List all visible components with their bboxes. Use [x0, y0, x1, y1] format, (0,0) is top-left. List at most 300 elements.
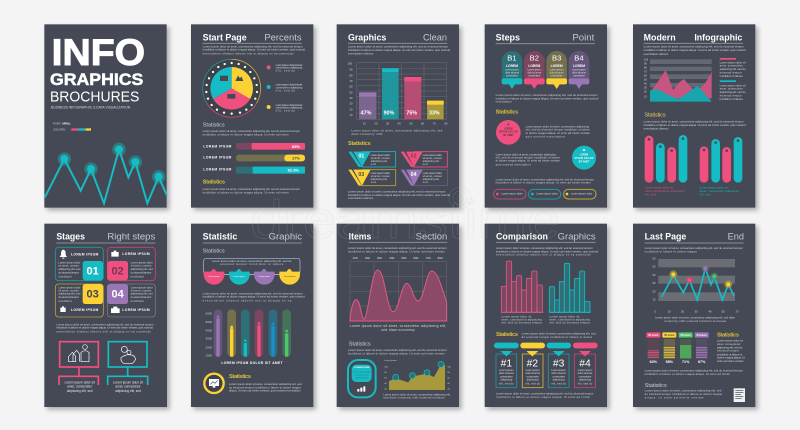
- pink frame caption: adipiscing elit, sed: [67, 389, 93, 393]
- olive area chart: 20: [384, 388, 388, 390]
- tile 01: Lorem ipsum dolor: [371, 153, 390, 157]
- step B4: LOREM: [573, 64, 585, 68]
- intro text: [645, 246, 743, 253]
- area chart: 200: [365, 256, 370, 260]
- olive area chart: Lorem ipsum: [384, 359, 397, 362]
- bottom text: sed diam nonummy nibh euismod tincidunt: [383, 396, 445, 400]
- card 01: do eiusmod tempor: [58, 270, 79, 274]
- intro text: incididunt ut labore et dolore magna aliqua. Ut enim ad minim veniam, quis nostrud: [348, 48, 450, 52]
- olive area chart: 60: [384, 377, 388, 379]
- area chart: 700: [426, 256, 431, 260]
- callout text 1: elit, sed do eiusmod tempor incididunt ut labore: [526, 128, 590, 132]
- side statistics text: incididunt ut labore et: [717, 352, 743, 356]
- callout text 1: quis nostrud exercitation: [526, 135, 565, 139]
- olive area chart: 100: [447, 366, 452, 368]
- bottom statistics text: [203, 180, 300, 195]
- intro text: incididunt ut labore et dolore magna aliqua. Ut enim ad minim veniam, quis nostrud: [496, 249, 598, 253]
- step B2: Lorem ipsum: [527, 68, 542, 72]
- flow of half circles: Lorem ipsum: [208, 275, 220, 278]
- card 03: sit amet, consec: [58, 288, 80, 292]
- flow of half circles: Lorem ipsum: [233, 275, 245, 278]
- intro text: Lorem ipsum dolor sit amet, consectetur adipiscing elit, sed do eiusmod tempor: [348, 45, 448, 49]
- statistics text: [644, 112, 746, 130]
- statistics text: incididunt ut labore et dolore magna aliqua. Ut enim ad minim veniam, quis nostrud: [644, 123, 746, 127]
- heading: Graphics: [558, 231, 596, 241]
- rounded bars group 1: [645, 135, 687, 183]
- cyan icon frame: [108, 342, 148, 385]
- card 02: sit amet, consec: [131, 264, 152, 268]
- pie legend: elit, sed do: [276, 109, 295, 113]
- bottom text: exercitation ullamco: [348, 196, 374, 200]
- stripe meter 4: B4 lorem: [697, 334, 707, 337]
- statistics text: incididunt ut labore et dolore magna aliqua. Ut enim ad minim: [203, 132, 289, 136]
- rank 4: #4: [579, 358, 591, 369]
- statistics text: [496, 331, 596, 339]
- callout text 1: Lorem ipsum dolor sit amet, consectetur adipiscing: [526, 125, 589, 129]
- area chart: 90: [644, 63, 647, 66]
- intro text: Lorem ipsum dolor sit amet, consectetur adipiscing elit, sed do eiusmod tempor: [203, 44, 303, 48]
- vertical bar chart: 2000: [206, 345, 212, 349]
- lower text: [496, 177, 594, 185]
- step B1: LOREM: [506, 64, 518, 68]
- step B3: Lorem ipsum: [550, 68, 564, 72]
- card 02: do eiusmod tempor: [131, 270, 151, 274]
- heading: [56, 232, 156, 243]
- card 04: incididunt: [131, 299, 144, 303]
- side statistics text: enim ad minim veniam: [717, 359, 744, 363]
- chart legend: incididunt ut labore: [720, 74, 743, 78]
- stripe meter 3: [679, 332, 693, 364]
- area chart: 100: [353, 256, 358, 260]
- statistics text: do eiusmod tempor incididunt ut labore et dolore magna: [229, 385, 301, 389]
- statistics text: [203, 123, 300, 136]
- step B2: dolor sit amet: [527, 70, 542, 74]
- statistics text: Statistics: [229, 374, 251, 380]
- bar chart: 50: [409, 122, 413, 126]
- area chart: 300: [377, 256, 382, 260]
- pink caption: [645, 186, 685, 196]
- heading: Items: [349, 231, 371, 241]
- pink caption: elit, sed: [645, 192, 656, 196]
- cover title: [50, 31, 145, 110]
- side statistics text: Lorem ipsum dolor sit: [717, 339, 743, 343]
- bar chart: 40: [349, 96, 353, 100]
- line chart: [652, 256, 739, 314]
- cyan frame caption: Lorem ipsum dolor sit: [113, 381, 143, 385]
- chart caption: Lorem ipsum dolor sit amet, consectetur adipiscing elit,: [350, 324, 446, 328]
- side statistics text: [717, 332, 745, 363]
- font and colors note: COLORS:: [53, 127, 66, 131]
- cover title: INFO: [52, 31, 145, 73]
- cyan info badge: Lorem ipsum dolor: [353, 370, 371, 373]
- pink circle callout: IPSUM DOLOR: [499, 132, 518, 134]
- tile 03: sed: [371, 180, 376, 184]
- statistics text: Statistics: [496, 332, 518, 338]
- brochure 5: modern infographic: [633, 24, 755, 208]
- bottom text: [348, 190, 450, 200]
- card 02: incididunt: [131, 274, 144, 278]
- tile 04: sit amet, consec: [423, 174, 443, 178]
- olive area chart: [384, 359, 452, 390]
- olive area chart: 60: [447, 377, 451, 379]
- tile 02: 02: [411, 154, 417, 160]
- tile 01: sed: [371, 162, 376, 166]
- bar chart: 40: [398, 122, 401, 126]
- step B3: [546, 51, 567, 89]
- intro text: incididunt ut labore et dolore magna: [645, 249, 697, 253]
- bottom text: [383, 392, 451, 400]
- bar chart: 10: [363, 122, 366, 126]
- vertical bar chart: 3000: [206, 337, 212, 341]
- bar chart: 80: [444, 122, 448, 126]
- tile 01: sit amet, consec: [371, 156, 391, 160]
- chart legend: eiusmod tempor: [720, 94, 742, 98]
- pie legend: consectetur adipiscing: [276, 85, 303, 89]
- cyan info badge: sit amet, consec: [354, 373, 370, 376]
- bar chart: 80: [349, 73, 353, 77]
- card 01: 01: [87, 265, 99, 277]
- rank 2: dolor sit amet: [525, 371, 540, 375]
- vertical bar chart: 1000: [206, 354, 212, 358]
- step B3: B3: [552, 54, 561, 63]
- tile 02: [401, 152, 447, 167]
- bar chart: 10: [349, 113, 353, 117]
- tile 02: sit amet, consec: [423, 156, 443, 160]
- tile 01: 01: [358, 154, 364, 160]
- olive area chart: 100: [384, 366, 389, 368]
- tile 04: [401, 170, 447, 186]
- step B3: LOREM: [551, 64, 563, 68]
- rank 1: [494, 343, 519, 388]
- statistics text: [348, 341, 447, 355]
- bottom statistics text: incididunt ut labore et dolore magna aliqua. Ut enim ad minim: [203, 191, 289, 195]
- progress bars: LOREM IPSUM: [203, 155, 232, 159]
- chart captions: [501, 314, 590, 325]
- heading: Steps: [496, 32, 520, 42]
- line chart: 50: [652, 265, 656, 269]
- heading: [348, 32, 447, 43]
- bottom text: Lorem ipsum dolor sit amet, consectetur adipiscing elit,: [383, 392, 451, 396]
- bottom text: Lorem ipsum dolor sit amet, consectetur adipiscing elit, sed do eiusmod tempor: [348, 190, 445, 194]
- bottom text: Lorem ipsum dolor sit amet, consectetur adipiscing elit, sed do eiusmod tempor: [496, 392, 593, 396]
- cyan frame caption: amet, consectetur: [115, 385, 141, 389]
- rank 1: adipiscing: [500, 378, 513, 382]
- line chart: 50: [722, 310, 725, 314]
- rank 2: Lorem ipsum: [525, 368, 541, 372]
- olive area chart: 40: [384, 383, 388, 385]
- side statistics text: eiusmod tempor: [717, 349, 739, 353]
- step B1: consectetur: [506, 73, 518, 77]
- card 04: do eiusmod tempor: [131, 295, 151, 299]
- cyan frame caption: [113, 381, 143, 393]
- statistics text: Statistics: [203, 123, 225, 129]
- cyan circle callout: LOREM: [580, 155, 588, 157]
- heading: [203, 32, 302, 43]
- callout text 1: [526, 125, 591, 139]
- vertical bar chart: 4000: [206, 328, 212, 332]
- cyan frame caption: adipiscing elit, sed: [115, 389, 141, 393]
- chart captions: amet, consectetur adipiscing: [501, 317, 542, 321]
- bar chart: 30: [386, 122, 390, 126]
- card 04: 04: [112, 288, 125, 300]
- lower text: Lorem ipsum dolor sit amet, consectetur adipiscing elit, sed do eiusmod tempor: [496, 177, 594, 181]
- tile 03: sit amet, consec: [371, 174, 391, 178]
- rank 4: elit, sed do: [578, 381, 593, 385]
- heading: Graphics: [348, 32, 386, 42]
- chart legend: amet, consectetur: [720, 64, 743, 68]
- chart caption: [350, 324, 446, 332]
- middle text: incididunt ut labore et dolore magna aliqua. Ut enim ad minim veniam, quis nostrud: [203, 295, 305, 299]
- area chart: 600: [413, 256, 419, 260]
- bottom statistics text: Statistics: [645, 383, 667, 389]
- rank 3: Lorem ipsum: [551, 368, 567, 372]
- progress bars: LOREM IPSUM: [203, 144, 232, 148]
- cover line chart: [45, 143, 167, 203]
- intro text: incididunt ut labore et dolore magna aliqua. Ut enim ad minim veniam, quis nostrud: [644, 48, 746, 52]
- pie legend: [267, 63, 303, 113]
- statistics text: Statistics: [349, 341, 371, 347]
- progress bars: 82.3%: [288, 168, 299, 173]
- side statistics text: dolore magna aliqua. Ut: [717, 356, 745, 360]
- bottom text: incididunt ut labore et dolore magna aliqua. Ut enim ad minim: [496, 395, 591, 399]
- stripe meter 2: B2 lorem: [664, 335, 674, 337]
- tile 03: 03: [358, 172, 364, 178]
- line chart: 10: [652, 298, 656, 302]
- card 04: sit amet, consec: [131, 288, 152, 292]
- chart captions: Lorem ipsum dolor sit: [549, 314, 580, 318]
- area chart: [644, 59, 712, 102]
- chart captions: elit, sed do eiusmod tempor: [549, 321, 590, 325]
- intro text: [644, 45, 746, 56]
- statistics text: Lorem ipsum dolor sit amet, consectetur adipiscing elit, sed: [522, 331, 596, 335]
- line chart: 40: [652, 273, 656, 277]
- step B4: [569, 51, 589, 89]
- stripe meter 1: [646, 332, 660, 364]
- pie legend: Lorem ipsum dolor sit amet: [276, 63, 303, 67]
- card 04: Lorem ipsum dolor: [131, 285, 153, 289]
- pink caption: amet, consectetur adipiscing: [645, 189, 685, 193]
- rank 1: dolor sit amet: [499, 371, 514, 375]
- pie chart: [203, 59, 261, 117]
- bar chart: 90%: [384, 111, 395, 117]
- pink circle callout: [496, 120, 521, 145]
- pink frame caption: [65, 381, 95, 393]
- rank 4: Lorem ipsum: [578, 368, 593, 372]
- stripe meter 4: [695, 332, 709, 364]
- card 01: LOREM IPSUM: [71, 253, 99, 257]
- bottom text: [496, 392, 593, 399]
- heading: [644, 32, 743, 43]
- chart caption: diam nonummy nibh: [351, 132, 383, 136]
- chart legend: [720, 58, 746, 101]
- tile 02: adipiscing elit,: [423, 159, 440, 163]
- bar chart: 50: [349, 90, 353, 94]
- stages text: [56, 322, 154, 333]
- statistics text: do eiusmod tempor incididunt ut labore et dolore: [522, 335, 593, 339]
- rank 3: adipiscing: [553, 378, 565, 382]
- rank 3: [547, 343, 571, 388]
- cyan caption: Lorem ipsum dolor sit: [700, 186, 728, 190]
- area chart: 70: [644, 71, 647, 74]
- pill labels: Lorem ipsum dolor: [501, 192, 523, 196]
- bottom statistics text: [645, 383, 722, 400]
- pill labels: Lorem ipsum dolor: [536, 192, 558, 196]
- area chart: 60: [644, 75, 647, 78]
- stripe meter 4: 67%: [698, 360, 706, 364]
- steps text: [496, 93, 599, 104]
- stripe meter 2: [662, 332, 676, 364]
- rank 4: adipiscing: [579, 378, 591, 382]
- bar chart: 20: [349, 107, 353, 111]
- rank 4: consectetur: [579, 374, 591, 378]
- card 01: [55, 247, 103, 281]
- cover title: GRAPHICS: [50, 70, 143, 89]
- brochure 6: stages: [44, 224, 167, 407]
- heading: End: [728, 231, 744, 241]
- pink circle callout: SIT AMET: [503, 134, 514, 137]
- intro text: Lorem ipsum dolor sit amet, consectetur adipiscing elit, sed do eiusmod tempor: [496, 246, 593, 250]
- pink frame caption: Lorem ipsum dolor sit: [65, 381, 95, 385]
- callout text 2: Lorem ipsum dolor sit amet, consectetur adipiscing: [496, 152, 556, 156]
- vertical bar chart: 6000: [206, 312, 212, 316]
- heading: Point: [572, 32, 595, 42]
- card 01: Lorem ipsum dolor: [58, 261, 80, 265]
- stripe meter 3: 71%: [682, 360, 690, 364]
- chart caption: sed diam nonummy: [381, 328, 415, 332]
- bar chart: 33%: [429, 111, 440, 117]
- card 03: Lorem ipsum dolor: [58, 285, 80, 289]
- steps text: incididunt ut labore et dolore magna aliqua. Ut enim ad minim veniam, quis nostrud: [496, 96, 599, 100]
- statistics heading: Statistics: [496, 109, 518, 115]
- pink bar chart: [501, 261, 543, 312]
- statistics text: Lorem ipsum dolor sit amet, consectetur adipiscing elit, sed do eiusmod tempor: [348, 348, 447, 352]
- bar chart: [347, 61, 448, 126]
- callout text 1: et dolore magna aliqua. Ut enim ad minim veniam: [526, 131, 591, 135]
- tile 04: Lorem ipsum dolor: [423, 171, 442, 175]
- steps text: Lorem ipsum dolor sit amet, consectetur adipiscing elit, sed do eiusmod tempor: [496, 93, 598, 97]
- card 02: adipiscing elit, sed: [131, 267, 153, 271]
- rank 3: consectetur: [552, 374, 565, 378]
- card 02: LOREM IPSUM: [122, 252, 150, 256]
- card 04: adipiscing elit, sed: [131, 292, 153, 296]
- line chart: 20: [681, 310, 685, 314]
- step B3: consectetur: [551, 73, 563, 77]
- heading: Last Page: [645, 231, 686, 241]
- card 03: LOREM IPSUM: [71, 308, 99, 312]
- chart legend: Lorem ipsum dolor sit: [720, 84, 746, 88]
- heading: Infographic: [694, 32, 742, 42]
- progress bars: [203, 143, 305, 174]
- intro text: [348, 45, 450, 56]
- monitor badge icon: [204, 374, 224, 393]
- bar chart: 60: [421, 122, 425, 126]
- watermark: dreamstime: [250, 190, 560, 250]
- chart caption: nonummy nibh euismod tincidunt ut laoreet: [664, 319, 727, 323]
- chart caption: Lorem ipsum dolor sit amet, consectetur adipiscing elit, sed diam: [655, 315, 736, 319]
- card 02: 02: [112, 265, 124, 277]
- line chart: 20: [652, 290, 656, 294]
- olive area chart: 20: [447, 388, 451, 390]
- pie legend: elit, sed do: [276, 89, 295, 93]
- rank 1: consectetur: [500, 374, 513, 378]
- font and colors note: FONT: ARIAL: [53, 122, 71, 126]
- step B3: dolor sit amet: [550, 70, 564, 74]
- rank 2: #2: [527, 358, 538, 369]
- area chart: 40: [644, 83, 647, 86]
- chart caption: Lorem ipsum dolor sit amet, consectetur adipiscing elit, sed: [351, 128, 443, 132]
- line chart: 10: [668, 310, 671, 314]
- card 01: sit amet, consec: [58, 264, 80, 268]
- middle text: incididunt ut labore et dolore magna aliqua. Ut enim ad minim: [645, 372, 731, 376]
- step B1: B1: [507, 54, 517, 63]
- tile 03: [348, 170, 396, 186]
- heading: [349, 231, 447, 242]
- tile 03: adipiscing elit,: [371, 177, 388, 181]
- brochure 1: cover: [44, 24, 167, 208]
- chart caption: [655, 315, 736, 323]
- steps text: exercitation: [496, 100, 512, 104]
- chart captions: Lorem ipsum dolor sit: [501, 314, 532, 318]
- intro text: incididunt ut labore et dolore magna aliqua. Ut enim ad minim veniam, quis nostrud: [203, 48, 305, 52]
- bar chart: 60: [349, 85, 353, 89]
- middle text: Lorem ipsum dolor sit amet, consectetur adipiscing elit, sed do eiusmod tempor: [203, 291, 303, 295]
- intro text: [496, 246, 598, 257]
- heading: Stages: [56, 232, 85, 242]
- area chart: 100: [644, 59, 649, 62]
- tile 03: Lorem ipsum dolor: [371, 171, 390, 175]
- cyan caption: elit, sed: [700, 192, 711, 196]
- step B2: [524, 51, 545, 89]
- bar chart: 70: [433, 122, 436, 126]
- intro text: incididunt ut labore et dolore magna aliqua. Ut enim ad minim veniam: [348, 249, 445, 253]
- bottom statistics text: Lorem ipsum dolor sit amet, consectetur adipiscing elit, sed do eiusmod tempor: [203, 187, 300, 191]
- heading: Statistic: [203, 232, 237, 242]
- rank 2: adipiscing: [527, 378, 539, 382]
- bar chart: 100: [347, 61, 352, 65]
- cyan circle callout: SIT AMET: [579, 160, 590, 163]
- statistics text: Statistics: [644, 112, 666, 118]
- stripe meter 2: 58%: [666, 360, 674, 364]
- tile 04: sed: [423, 180, 428, 184]
- chart legend: adipiscing elit, sed do: [720, 67, 746, 71]
- bottom statistics text: Lorem ipsum dolor sit amet, consectetur adipiscing elit, sed: [645, 389, 722, 393]
- cover title: BUSINESS INFOGRAPHIC & DATA VISUALIZATION: [51, 106, 131, 110]
- line chart: 30: [695, 310, 698, 314]
- middle text: [203, 291, 305, 302]
- font and colors note: [53, 122, 91, 131]
- intro text: [203, 44, 305, 55]
- flow of half circles: [204, 258, 300, 285]
- pie icons: [220, 76, 243, 99]
- callout text 2: quis nostrud exercitation: [496, 162, 531, 166]
- heading: Right steps: [107, 232, 156, 242]
- rank 1: Lorem ipsum: [499, 368, 514, 372]
- cyan bar chart: [549, 263, 591, 312]
- flow of half circles: Lorem ipsum dolor sit amet, consectetur adipiscing elit, sed do: [212, 259, 292, 263]
- brochure 10: last page: [633, 224, 755, 407]
- intro text: Lorem ipsum dolor sit amet, consectetur adipiscing elit, sed do eiusmod tempor: [644, 45, 744, 49]
- brochure 3: graphics: [337, 24, 459, 208]
- middle text: Lorem ipsum dolor sit amet, consectetur adipiscing elit, sed do eiusmod tempor: [645, 369, 743, 373]
- tile 02: Lorem ipsum dolor: [423, 153, 442, 157]
- intro text: exercitation ullamco: [644, 52, 669, 56]
- chart legend: Lorem ipsum dolor sit: [720, 61, 746, 65]
- pill labels: [494, 189, 596, 199]
- step B4: consectetur: [573, 73, 585, 77]
- pink caption: Lorem ipsum dolor sit: [645, 186, 673, 190]
- bottom statistics text: aliqua. Ut enim ad minim veniam: [645, 396, 704, 400]
- brochure 8: items: [337, 224, 459, 407]
